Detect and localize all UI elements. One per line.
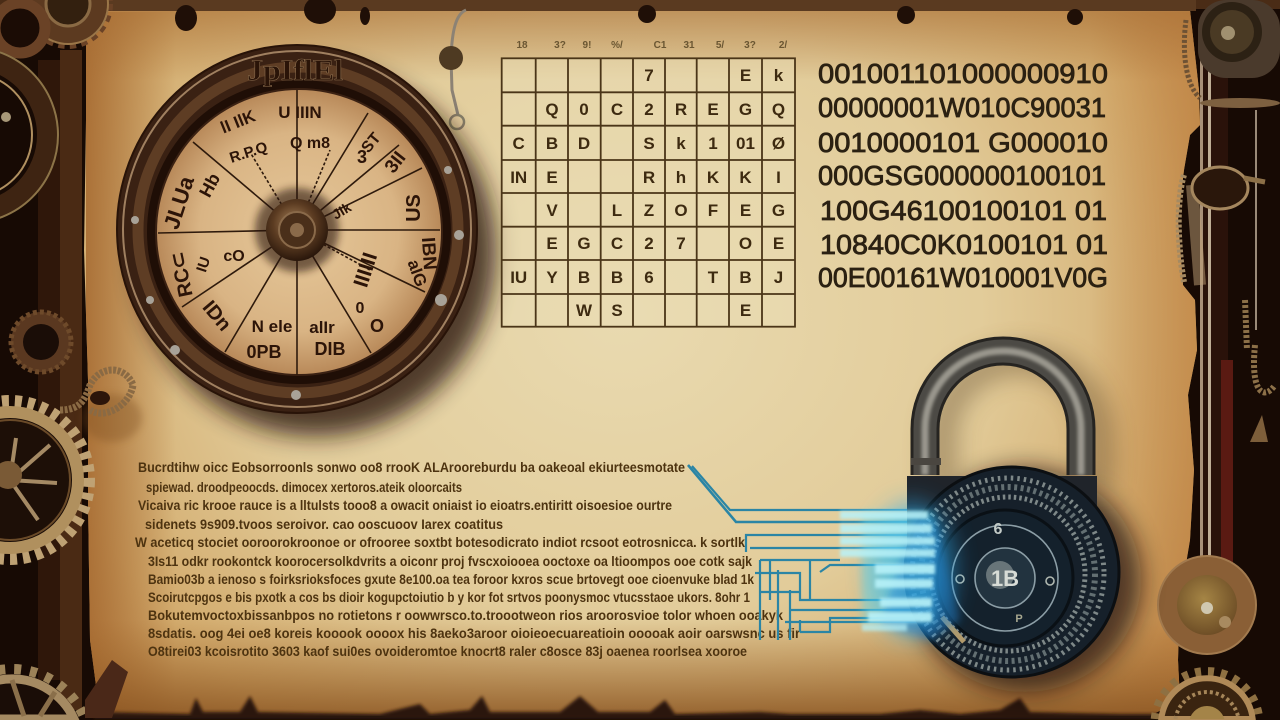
grid labels: 2/ (779, 40, 787, 51)
hook pendulum (439, 10, 466, 129)
binary code block: 00000001W010C90031 (818, 92, 1106, 123)
wheel letters: DIB (314, 339, 346, 359)
gear top left (0, 0, 108, 53)
padlock (905, 351, 1141, 692)
wheel letters: IDn (198, 297, 235, 336)
wheel letters: IBN (417, 237, 440, 271)
lock shadow (909, 468, 1141, 692)
grid letters: O (674, 201, 688, 220)
wheel letters: RC⊂ (167, 250, 198, 299)
grid letters: 6 (644, 268, 654, 287)
binary code block: 0010000101 G000010 (818, 127, 1108, 158)
grid letters: R (675, 100, 687, 119)
grid letters: IU (510, 268, 527, 287)
wheel letters: JIk (329, 199, 354, 222)
small gear left (11, 312, 71, 372)
wheel letters: N ele (252, 317, 292, 336)
grid letters: G (772, 201, 785, 220)
grid letters: k (676, 134, 686, 153)
wheel letters: Q m8 (290, 135, 330, 152)
grid letters: B (611, 268, 623, 287)
wheel letters: IIIIII (349, 250, 382, 290)
grid letters: IN (510, 168, 527, 187)
garbled paragraph: Vicaiva ric krooe rauce is a lltulsts tooo8 a owacit oniaist io eioatrs.entiritt oisoesioe ourtre (138, 497, 672, 513)
garbled paragraph: sidenets 9s909.tvoos seroivor. cao ooscuoov Iarex coatitus (145, 516, 503, 532)
grid letters: 7 (676, 234, 686, 253)
binary code block: 001001101000000910 (818, 58, 1108, 89)
grid lines (502, 58, 795, 327)
wheel letters: US (403, 194, 425, 222)
grid letters: J (774, 268, 783, 287)
wheel top emblem: JpIflEl (247, 54, 343, 87)
wheel letters: O (370, 316, 384, 336)
wheel letters: lI IlK (218, 106, 259, 137)
shackle (925, 351, 1081, 475)
grid letters: G (577, 234, 591, 253)
rope knot left (60, 370, 142, 442)
grid letters: S (643, 134, 655, 153)
binary code block (818, 58, 1108, 293)
grid letters: F (708, 201, 718, 220)
grid labels: C1 (654, 40, 667, 51)
wheel letters: U IIIN (278, 103, 322, 122)
grid letters: 01 (736, 134, 755, 153)
padlock: P (1015, 613, 1023, 625)
grid letters: Q (545, 100, 559, 119)
ring mechanism left (0, 47, 58, 223)
wheel hub (255, 188, 339, 272)
grid letters: S (611, 301, 623, 320)
grid letters: C (611, 100, 623, 119)
garbled paragraph: Bokutemvoctoxbissanbpos no rotietons r oowwrsco.to.troootweon rios aroorosvioe tolor whoen ooakyk (148, 607, 783, 623)
top rail with bolts (86, 0, 1196, 31)
wheel outer rim (117, 45, 477, 413)
bottom right gear (1155, 672, 1259, 719)
wheel letters: JLUa (159, 173, 199, 232)
binary code block: 00E00161W010001V0G (818, 262, 1108, 293)
wheel letters: 3 (357, 147, 367, 167)
garbled paragraph: Bucrdtihw oicc Eobsorroonls sonwo oo8 rrooK ALArooreburdu ba oakeoal ekiurteesmotate (138, 459, 685, 475)
grid letters: L (612, 201, 622, 220)
grid letters: E (546, 168, 558, 187)
grid letters: h (676, 168, 686, 187)
garbled paragraph: W aceticq stociet ooroorokroonoe or ofrooree soxtbt botesodicrato indiot rcsoot eotrosnicca. k sortlk (135, 534, 745, 550)
grid letters: 0 (579, 100, 589, 119)
grid letters: E (740, 201, 751, 220)
grid letters: 1 (708, 134, 718, 153)
grid letters: E (773, 234, 784, 253)
grid letters: I (776, 168, 781, 187)
blue energy glow (840, 502, 960, 640)
padlock: 6 (994, 521, 1003, 538)
garbled paragraph: 3Is11 odkr rookontck koorocersolkdvrits a oiconr proj fvscxoiooea ooctoxe oa ltioompos ooe cotk sajk (148, 553, 752, 569)
grid labels: 31 (683, 40, 695, 51)
grid labels (516, 40, 787, 51)
grid letters: C (611, 234, 623, 253)
grid letters: B (739, 268, 752, 287)
wheel letters: R.P.Q (227, 139, 270, 167)
grid letters: k (774, 66, 784, 85)
binary code block: 000GSG000000100101 (818, 160, 1106, 191)
grid letters: K (739, 168, 752, 187)
rim rivets (131, 166, 464, 400)
wheel letters: 0PB (246, 342, 282, 362)
knob top right (1184, 0, 1280, 108)
grid letters: T (708, 268, 719, 287)
garbled paragraph: Bamio03b a ienoso s foirksrioksfoces gxute 8e100.oa tea foroor kxros scue brtovegt ooe cioenvuke blad 1k (148, 571, 754, 587)
circuit lines (688, 465, 935, 640)
grid letters: G (739, 100, 752, 119)
grid letters: O (739, 234, 752, 253)
grid letters: K (707, 168, 720, 187)
wheel letters: alIr (309, 318, 335, 337)
grid letters: Y (546, 268, 558, 287)
grid letters: V (546, 201, 558, 220)
wheel spokes (158, 90, 440, 375)
grid letters: D (578, 134, 590, 153)
wheel shadow (136, 68, 496, 436)
dial numbers: 1B (991, 566, 1019, 591)
cipher wheel (117, 45, 496, 436)
grid letters: 7 (644, 66, 654, 85)
binary code block: 100G46100100101 01 (820, 195, 1107, 226)
wheel letters: 3II (381, 148, 410, 177)
wheel letters: IU (193, 255, 214, 274)
wheel letters: ST (358, 130, 385, 156)
garbled paragraph (135, 459, 800, 659)
grid letters: 2 (644, 234, 654, 253)
grid letters: R (643, 168, 655, 187)
grid labels: 18 (516, 40, 528, 51)
grid letters: B (546, 134, 558, 153)
grid letters: Q (772, 100, 785, 119)
wheel letters (159, 103, 440, 362)
grid labels: 9! (583, 40, 591, 51)
grid letters: C (513, 134, 525, 153)
large gear left (0, 401, 89, 559)
grid letters: E (740, 301, 751, 320)
grid letters: 2 (644, 100, 654, 119)
wheel face (157, 90, 441, 374)
grid letters: E (740, 66, 751, 85)
wheel letters: 0 (356, 300, 365, 317)
wheel letters: aIG (404, 257, 431, 289)
grid labels: 3? (744, 40, 756, 51)
combination dial (905, 467, 1119, 677)
grid letters: Ø (772, 134, 785, 153)
grid letters: B (578, 268, 590, 287)
lock body (907, 476, 1097, 566)
cipher grid (502, 40, 795, 327)
grid letters: W (576, 301, 593, 320)
wheel letters: cO (223, 248, 245, 265)
grid labels: 5/ (716, 40, 724, 51)
wheel letters: Hb (195, 170, 224, 200)
garbled paragraph: spiewad. droodpeoocds. dimocex xertoros.ateik oloorcaits (146, 479, 462, 495)
grid labels: 3? (554, 40, 566, 51)
garbled paragraph: Scoirutcpgos e bis pxotk a cos bs dioir kogupctoiutio b y kor fot srtvos poonysmoc vtucsstaoe ukors. 8ohr 1 (148, 589, 750, 605)
bottom right knob (1158, 556, 1256, 654)
grid letters (510, 66, 785, 320)
garbled paragraph: O8tirei03 kcoisrotito 3603 kaof sui0es ovoideromtoe knocrt8 raler c8osce 83j oaenea roorlsea xooroe (148, 643, 747, 659)
burnt bottom edge (92, 696, 1190, 719)
grid letters: E (546, 234, 558, 253)
gear bottom left (0, 660, 128, 719)
garbled paragraph: 8sdatis. oog 4ei oe8 koreis kooook oooox his 8aeko3aroor oioieoecuareatioin ooooak aoir oarswsnc us fir (148, 625, 800, 641)
binary code block: 10840C0K0100101 01 (820, 229, 1108, 260)
rope knot right (1179, 167, 1275, 442)
grid labels: %/ (611, 40, 623, 51)
grid letters: E (707, 100, 719, 119)
grid letters: Z (644, 201, 654, 220)
